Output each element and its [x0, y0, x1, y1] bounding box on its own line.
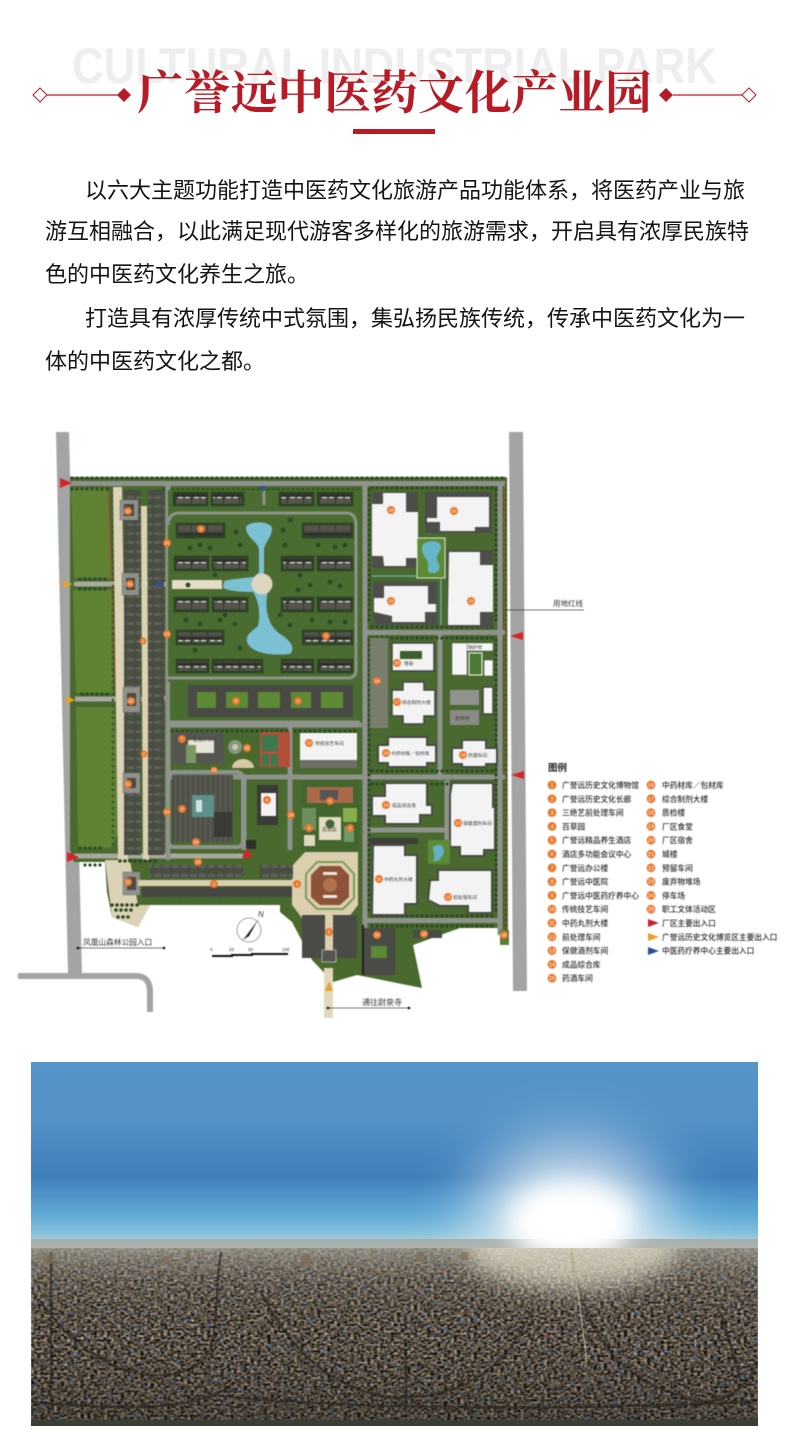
scale bar: 0: [210, 947, 213, 952]
city gate towers: [120, 500, 140, 895]
west historic corridor buildings: [124, 490, 164, 855]
numbered building markers: 20: [374, 933, 380, 938]
legend column two: 预留车间: [662, 863, 693, 873]
legend column one: 4: [550, 824, 554, 830]
numbered building markers: 24: [211, 768, 217, 773]
intro paragraph two: 打造具有浓厚传统中式氛围，集弘扬民族传统，传承中医药文化为一: [85, 306, 745, 331]
temple callout: [327, 997, 410, 1009]
numbered building markers: 12: [445, 895, 451, 900]
numbered building markers: 10: [306, 741, 312, 746]
legend column two: 中药材库／包材库: [662, 780, 724, 790]
tree rows along roads: [72, 478, 506, 945]
legend column one: 9: [550, 893, 554, 899]
west beige promenades: [105, 487, 150, 927]
sun core: [509, 1182, 633, 1262]
legend column two: 16: [648, 783, 654, 789]
numbered building markers: 4: [349, 826, 352, 831]
numbered building markers: 24: [164, 632, 170, 637]
building labels: 广誉远办公楼: [188, 736, 217, 743]
bottom edge: [31, 1420, 758, 1426]
legend column one: 三绝艺前处理车间: [562, 808, 624, 818]
numbered building markers: 9: [200, 527, 203, 532]
numbered building markers: 7: [181, 737, 184, 742]
building labels: 百草园: [322, 826, 337, 833]
sunlit haze over city: [456, 1248, 686, 1307]
legend column two: 质检楼: [662, 808, 685, 818]
site base green: [70, 477, 508, 988]
numbered building markers: 9: [325, 634, 328, 639]
legend column one: 10: [549, 907, 555, 913]
numbered building markers: 20: [394, 661, 400, 666]
master plan map: [18, 432, 778, 1018]
legend column one: 13: [549, 949, 555, 955]
legend column two: 职工文体活动区: [662, 904, 716, 914]
legend column one: 14: [549, 962, 555, 968]
numbered building markers: 24: [164, 541, 170, 546]
legend column two: 厂区宿舍: [662, 835, 693, 845]
sky: [31, 1062, 758, 1248]
external roads: [18, 432, 527, 1012]
legend column two: 22: [648, 866, 654, 872]
building labels: 前处理车间: [453, 894, 477, 901]
courtyard residences: [168, 682, 360, 722]
building labels: 中药丸剂大楼: [384, 876, 413, 883]
legend column one: 1: [550, 783, 554, 789]
main title: 广誉远中医药文化产业园: [137, 68, 652, 120]
building labels: 宿舍: [404, 660, 414, 667]
sunlit avenue: [572, 1248, 587, 1362]
panorama photo: [31, 1062, 758, 1426]
building labels: 药酒车间: [468, 752, 487, 759]
building labels: 废弃物: [455, 715, 470, 722]
background english title: CULTURAL INDUSTRIAL PARK: [72, 38, 717, 94]
legend column two: 厂区食堂: [662, 821, 693, 831]
intro paragraph one: [45, 178, 749, 287]
numbered building markers: 2: [213, 882, 216, 887]
legend: [548, 762, 777, 983]
numbered building markers: 25: [244, 746, 250, 751]
numbered building markers: 24: [374, 679, 380, 684]
intro paragraph two: 体的中医药文化之都。: [45, 349, 265, 374]
legend column one: 6: [550, 852, 554, 858]
numbered building markers: [124, 506, 508, 939]
numbered building markers: 2: [142, 639, 145, 644]
numbered building markers: 22: [388, 508, 394, 513]
legend column one: 药酒车间: [562, 973, 593, 983]
scale bar: [210, 947, 290, 956]
building labels: 锅炉房: [468, 644, 483, 651]
numbered building markers: 2: [328, 930, 331, 935]
octagonal plaza with museum: [292, 852, 358, 922]
numbered building markers: 24: [164, 810, 170, 815]
horizon haze: [31, 1239, 758, 1250]
legend column two: 21: [648, 852, 654, 858]
museum forecourt buildings: [302, 915, 357, 1018]
legend column one: 广誉远中医药疗养中心: [562, 890, 639, 900]
numbered building markers: 1: [296, 882, 299, 887]
legend column one: 8: [550, 880, 554, 886]
dark footprints: [372, 492, 493, 627]
left title ornament: [32, 87, 131, 103]
legend column one: 广誉远办公楼: [562, 863, 608, 873]
legend column one: 2: [550, 797, 554, 803]
office, hospital and southern buildings: [168, 732, 290, 849]
building labels: 保健酒剂车间: [463, 820, 492, 827]
legend column two: 中医药疗养中心主要出入口: [662, 946, 754, 956]
building labels: [188, 644, 492, 901]
residences: [174, 493, 352, 672]
numbered building markers: 21: [125, 509, 131, 514]
legend column one: 12: [549, 935, 555, 941]
legend title: 图例: [548, 762, 567, 774]
right title ornament: [659, 87, 757, 103]
parking area: [370, 638, 388, 728]
numbered building markers: 24: [195, 860, 201, 865]
legend column two: 18: [648, 811, 654, 817]
intro paragraph one: 色的中医药文化养生之旅。: [45, 262, 309, 287]
west axis walk: [172, 580, 222, 589]
building labels: 中药材库／包材库: [391, 750, 430, 757]
south west tree patch: [112, 861, 290, 917]
scale bar: 25: [229, 947, 235, 952]
numbered building markers: 16: [383, 751, 389, 756]
legend column one: 15: [549, 976, 555, 982]
site boundary callout: [507, 598, 584, 610]
scale bar: 100: [282, 947, 290, 952]
legend column two: 废弃物堆场: [662, 877, 701, 887]
curved streets: [31, 1252, 758, 1412]
dormitory and utility buildings: [392, 643, 493, 725]
legend column two: 城楼: [662, 849, 678, 859]
legend column one: 传统技艺车间: [562, 904, 608, 914]
legend column one: 3: [550, 811, 554, 817]
numbered building markers: 8: [329, 799, 332, 804]
south east dark buildings: [362, 925, 509, 975]
middle row white buildings: [300, 733, 497, 915]
temple callout: 通往尉泉寺: [362, 997, 402, 1007]
entrance flags: [60, 478, 524, 862]
legend column one: 广誉远中医院: [562, 877, 608, 887]
numbered building markers: 19: [421, 932, 427, 937]
site boundary callout: 用地红线: [553, 598, 583, 608]
legend column two: 停车场: [662, 890, 685, 900]
lake: [223, 522, 292, 655]
city gate roofs: [124, 504, 136, 890]
header: title block: [32, 38, 757, 134]
legend column one: 广誉远精品养生酒店: [562, 835, 632, 845]
sun wide glow: [471, 1142, 671, 1312]
numbered building markers: 9: [297, 699, 300, 704]
intro paragraph one: 游互相融合，以此满足现代游客多样化的旅游需求，开启具有浓厚民族特: [45, 219, 749, 244]
legend column one: 中药丸剂大楼: [562, 918, 608, 928]
numbered building markers: 22: [451, 509, 457, 514]
residential garden: [168, 490, 360, 682]
legend column one: 前处理车间: [562, 932, 601, 942]
legend column two: 20: [648, 838, 654, 844]
legend column one: 成品综合库: [562, 959, 601, 969]
numbered building markers: 18: [460, 753, 466, 758]
west roads: [69, 484, 505, 860]
legend column two: 综合制剂大楼: [662, 794, 708, 804]
pond water: [422, 541, 441, 573]
legend column one: [548, 780, 639, 983]
numbered building markers: 17: [394, 700, 400, 705]
north compass: [237, 910, 264, 942]
numbered building markers: 14: [383, 803, 389, 808]
numbered building markers: 5: [181, 807, 184, 812]
canal: [372, 576, 441, 625]
legend column one: 百草园: [562, 821, 585, 831]
main central road grid: [170, 481, 505, 960]
building labels: 成品综合库: [392, 802, 416, 809]
numbered building markers: 22: [388, 599, 394, 604]
numbered building markers: 9: [235, 699, 238, 704]
legend column two: 广誉远历史文化博览区主要出入口: [662, 932, 777, 942]
title underline bar: [353, 129, 435, 134]
legend column two: 25: [648, 907, 654, 913]
legend column one: 11: [549, 921, 555, 927]
red line boundary: [108, 478, 506, 945]
legend column two: 厂区主要出入口: [662, 918, 716, 928]
park entrance callout: [77, 937, 165, 949]
legend column two: 17: [648, 797, 654, 803]
numbered building markers: 13: [455, 821, 461, 826]
building labels: 传统技艺车间: [315, 740, 344, 747]
white roofs: [372, 493, 493, 625]
north compass: N: [258, 910, 264, 919]
intro paragraph two: [45, 306, 745, 374]
garden trees: [184, 518, 347, 652]
park entrance callout: 凤凰山森林公园入口: [83, 937, 152, 947]
distant towers: [43, 1252, 468, 1267]
legend column one: 广誉远历史文化博物馆: [562, 780, 639, 790]
west lawns: [71, 488, 122, 848]
intro paragraph one: 以六大主题功能打造中医药文化旅游产品功能体系，将医药产业与旅: [85, 178, 745, 203]
numbered building markers: 21: [127, 582, 133, 587]
legend column two: 23: [648, 880, 654, 886]
city ground: [31, 1248, 758, 1426]
numbered building markers: 24: [193, 840, 199, 845]
legend column two: 19: [648, 824, 654, 830]
legend column two: 24: [648, 893, 654, 899]
legend column two: [647, 780, 777, 956]
northeast white factory buildings: [372, 492, 493, 627]
building labels: 综合制剂大楼: [402, 699, 431, 706]
south corridor buildings: [138, 865, 293, 897]
numbered building markers: 11: [377, 877, 382, 882]
legend column one: 7: [550, 866, 554, 872]
legend column one: 广誉远历史文化长廊: [562, 794, 632, 804]
legend column one: 保健酒剂车间: [562, 946, 608, 956]
central trees: [172, 490, 496, 926]
numbered building markers: 21: [125, 782, 131, 787]
traditional garden block: [302, 780, 359, 852]
lake plaza circle: [252, 574, 272, 594]
numbered building markers: 22: [468, 599, 474, 604]
legend column one: 5: [550, 838, 554, 844]
numbered building markers: 6: [266, 798, 269, 803]
courtyard pond: [417, 538, 445, 578]
numbered building markers: 21: [125, 880, 131, 885]
numbered building markers: 2: [143, 752, 146, 757]
scale bar: 50: [248, 947, 254, 952]
numbered building markers: 25: [501, 933, 507, 938]
numbered building markers: 21: [128, 699, 134, 704]
legend column one: 酒店多功能会议中心: [562, 849, 632, 859]
numbered building markers: 24: [288, 813, 294, 818]
numbered building markers: 4: [308, 826, 311, 831]
